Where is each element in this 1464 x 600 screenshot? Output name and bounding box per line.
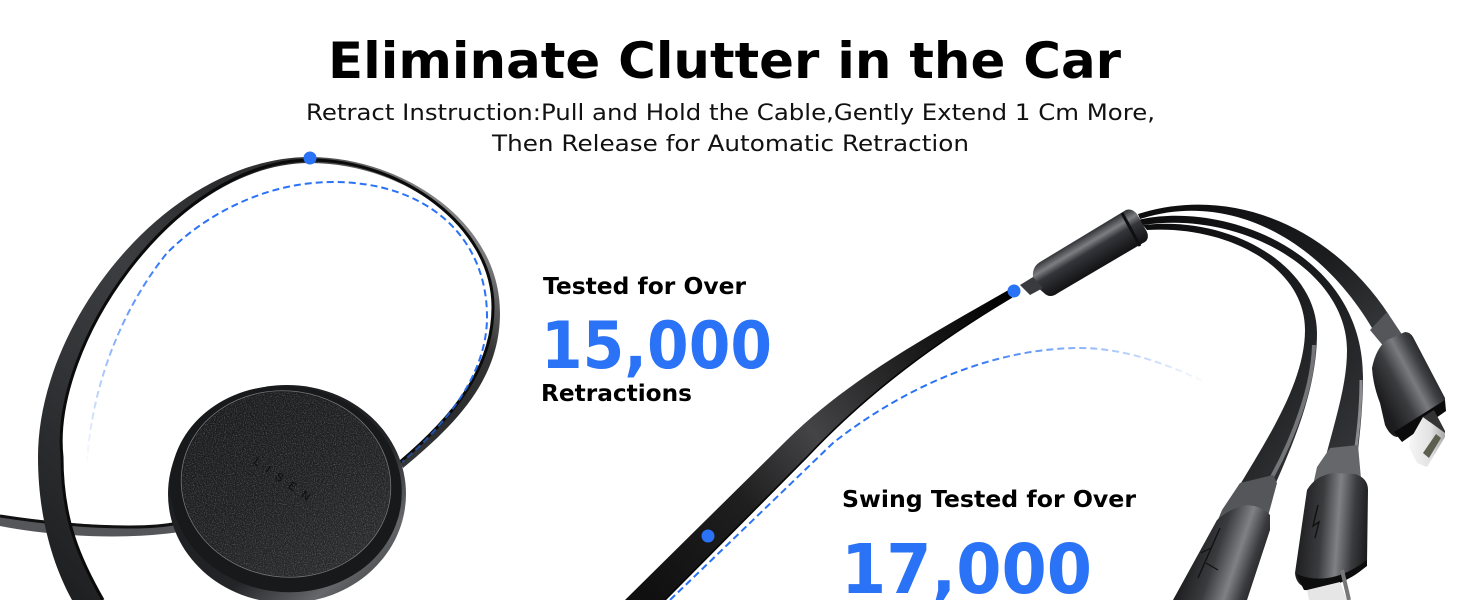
ribbon inner black edge: [61, 160, 493, 600]
dashed retraction path: [87, 182, 487, 463]
long flat cable: [625, 284, 1207, 600]
thin rear cable: [0, 515, 180, 536]
dashed swing path: [670, 348, 1207, 600]
flat ribbon cable loop: [38, 157, 500, 600]
marker dots: [702, 284, 1020, 542]
three-in-one cable head: [1020, 205, 1446, 600]
round leather puck: [168, 385, 406, 600]
stat: 17,000 swings: Swing Tested for Over: [842, 487, 1137, 513]
micro usb plug: [1370, 312, 1446, 467]
logo: LISEN: [251, 456, 312, 503]
usb plug: [1173, 475, 1277, 600]
subtitle: retract instruction: Retract Instruction:Pull and Hold the Cable,Gently Extend 1 Cm More,: [306, 101, 1155, 126]
stat: 15,000 retractions: [541, 274, 772, 407]
retractable cable reel product: [0, 152, 500, 600]
branch cable: usb: [1143, 224, 1317, 488]
stat: 17,000 swings: [841, 487, 1137, 600]
subtitle: retract instruction: Then Release for Automatic Retraction: [491, 132, 969, 157]
lightning plug: [1295, 445, 1368, 600]
branch cable: micro usb: [1138, 205, 1389, 328]
stat: 15,000 retractions: 15,000: [541, 309, 772, 384]
strain relief: [1020, 277, 1043, 295]
title: Eliminate Clutter in the Car: [328, 32, 1121, 90]
branch cable: lightning: [1138, 216, 1363, 460]
stat: 15,000 retractions: Retractions: [541, 381, 692, 407]
marker dot: [304, 152, 316, 164]
stat: 15,000 retractions: Tested for Over: [543, 274, 747, 300]
splitter tube: [1033, 210, 1148, 296]
subtitle: retract instruction: [306, 101, 1155, 157]
